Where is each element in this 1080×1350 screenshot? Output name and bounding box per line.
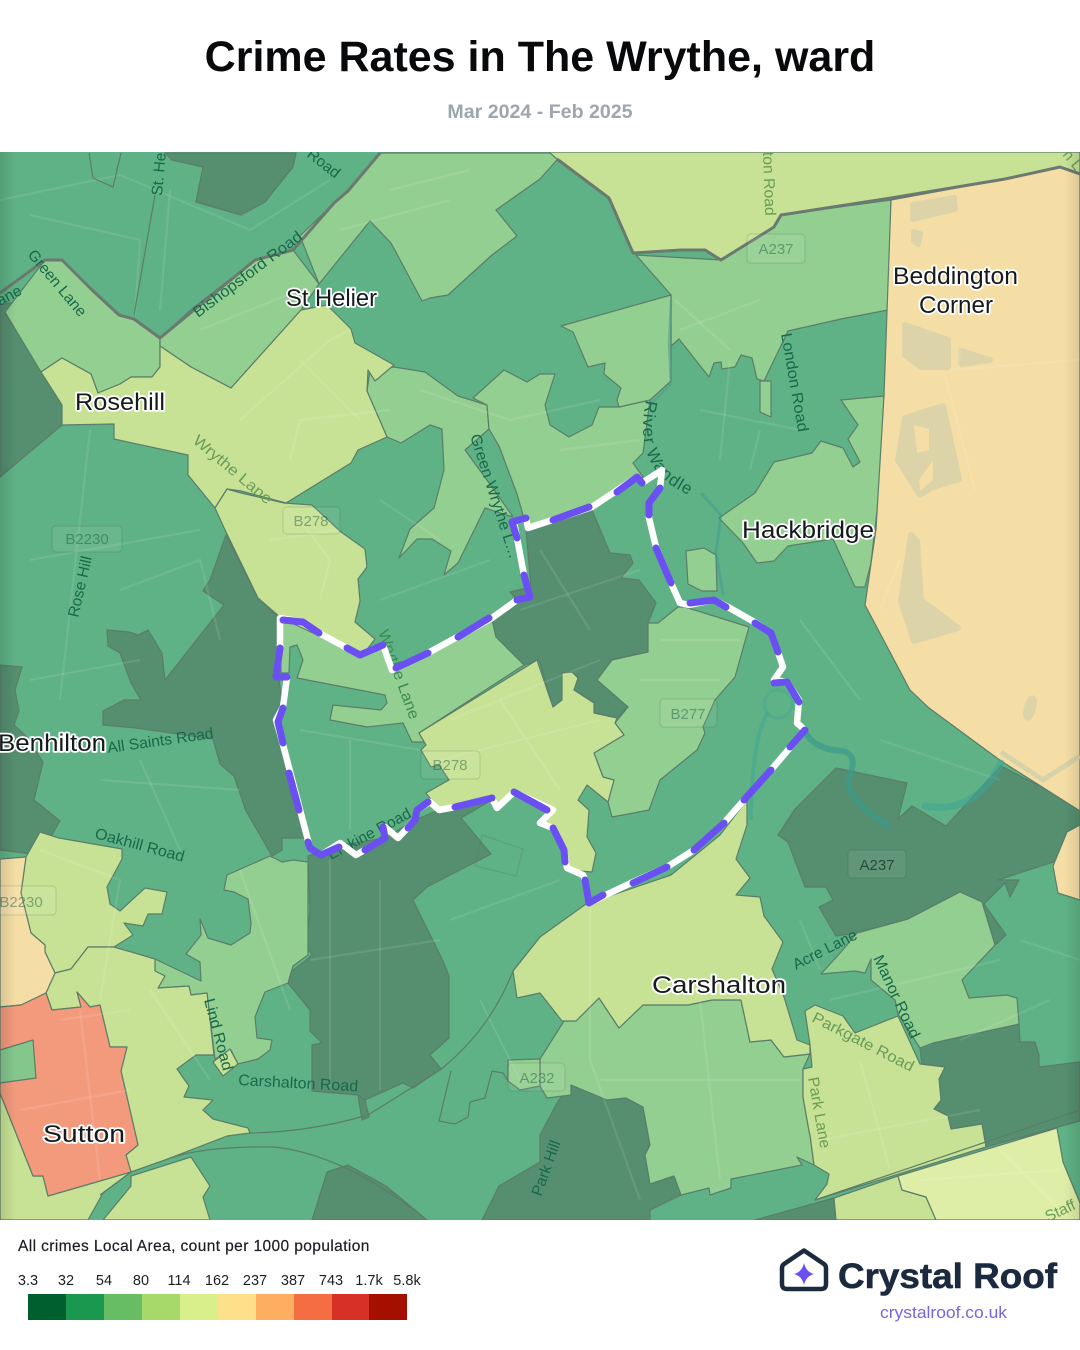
place names (0, 263, 1018, 1148)
edge vignette (0, 152, 1080, 1220)
road number shields: A237 (859, 857, 895, 874)
legend values: 387 (281, 1273, 305, 1289)
road labels: Oakhill Road (93, 825, 186, 866)
legend values: 54 (96, 1273, 112, 1289)
legend colour bar (28, 1294, 407, 1320)
road labels: All Saints Road (106, 725, 215, 757)
road labels: Park Hill (529, 1138, 564, 1198)
road labels: Green Lane (24, 247, 90, 320)
road number shields: B278 (293, 513, 329, 530)
neighbourhood crime-rate polygons (0, 152, 1080, 1220)
place names: Benhilton (0, 730, 106, 757)
road labels: Park Lane (804, 1076, 833, 1150)
road labels: Bishopsford Road (190, 228, 306, 321)
road number shields: B278 (432, 757, 468, 774)
ward boundary: The Wrythe (276, 470, 805, 903)
legend values: 80 (133, 1273, 149, 1289)
legend values (18, 1273, 421, 1289)
place names: St Helier (286, 285, 377, 312)
legend values: 3.3 (18, 1273, 38, 1289)
icon: Crystal Roof house logo (782, 1250, 826, 1289)
legend caption: All crimes Local Area, count per 1000 population (18, 1238, 370, 1255)
road labels: Carshalton Road (238, 1072, 359, 1095)
legend values: 32 (58, 1273, 74, 1289)
River Wandle (650, 301, 1001, 826)
choropleth map (0, 152, 1080, 1220)
road labels: Lind Road (200, 997, 236, 1073)
thin neighbourhood outlines (89, 153, 1080, 1220)
road labels: St. He (149, 152, 170, 196)
website link: crystalroof.co.uk (880, 1304, 1008, 1322)
road number shields: B2230 (65, 531, 109, 548)
legend values: 162 (205, 1273, 229, 1289)
lake islands (914, 425, 933, 491)
road labels: Erskine Road (325, 805, 414, 864)
road number shields: A232 (519, 1070, 555, 1087)
road labels: Road (304, 146, 343, 182)
road number shields: B2230 (0, 894, 43, 911)
wordmark: Crystal Roof (838, 1257, 1057, 1296)
place names: Sutton (43, 1121, 125, 1148)
road labels: Manor Road (869, 953, 923, 1041)
legend values: 743 (319, 1273, 343, 1289)
road labels (0, 152, 1080, 1220)
road labels: Parkgate Road (809, 1009, 917, 1075)
place names: Rosehill (75, 389, 165, 416)
road labels: Acre Lane (790, 927, 860, 974)
road labels: Staff (1043, 1197, 1079, 1226)
place names: Beddington (893, 263, 1018, 290)
lakes in Beddington Corner (898, 198, 1035, 718)
road labels: Rose Hill (65, 555, 96, 619)
place names: Hackbridge (742, 517, 874, 544)
thick ward borders (0, 153, 1080, 338)
road labels: London Road (777, 332, 811, 433)
place names: Carshalton (652, 972, 786, 999)
title: Crime Rates in The Wrythe, ward (205, 33, 875, 81)
road number shields: A237 (758, 241, 794, 258)
road number shields (0, 234, 906, 1091)
road number shields: B277 (670, 706, 706, 723)
road labels: River Wandle (643, 402, 691, 494)
subtitle: date range: Mar 2024 - Feb 2025 (447, 101, 633, 123)
faint street network (0, 170, 1080, 1210)
road labels: ton Road (759, 152, 778, 216)
legend values: 114 (167, 1273, 191, 1289)
road labels: Wrythe Lane (374, 628, 422, 722)
road labels: Wrythe Lane (189, 432, 275, 508)
place names: Corner (919, 292, 993, 319)
road labels: Green Wrythe L… (466, 432, 523, 561)
legend values: 5.8k (393, 1273, 421, 1289)
legend values: 1.7k (355, 1273, 383, 1289)
legend values: 237 (243, 1273, 267, 1289)
